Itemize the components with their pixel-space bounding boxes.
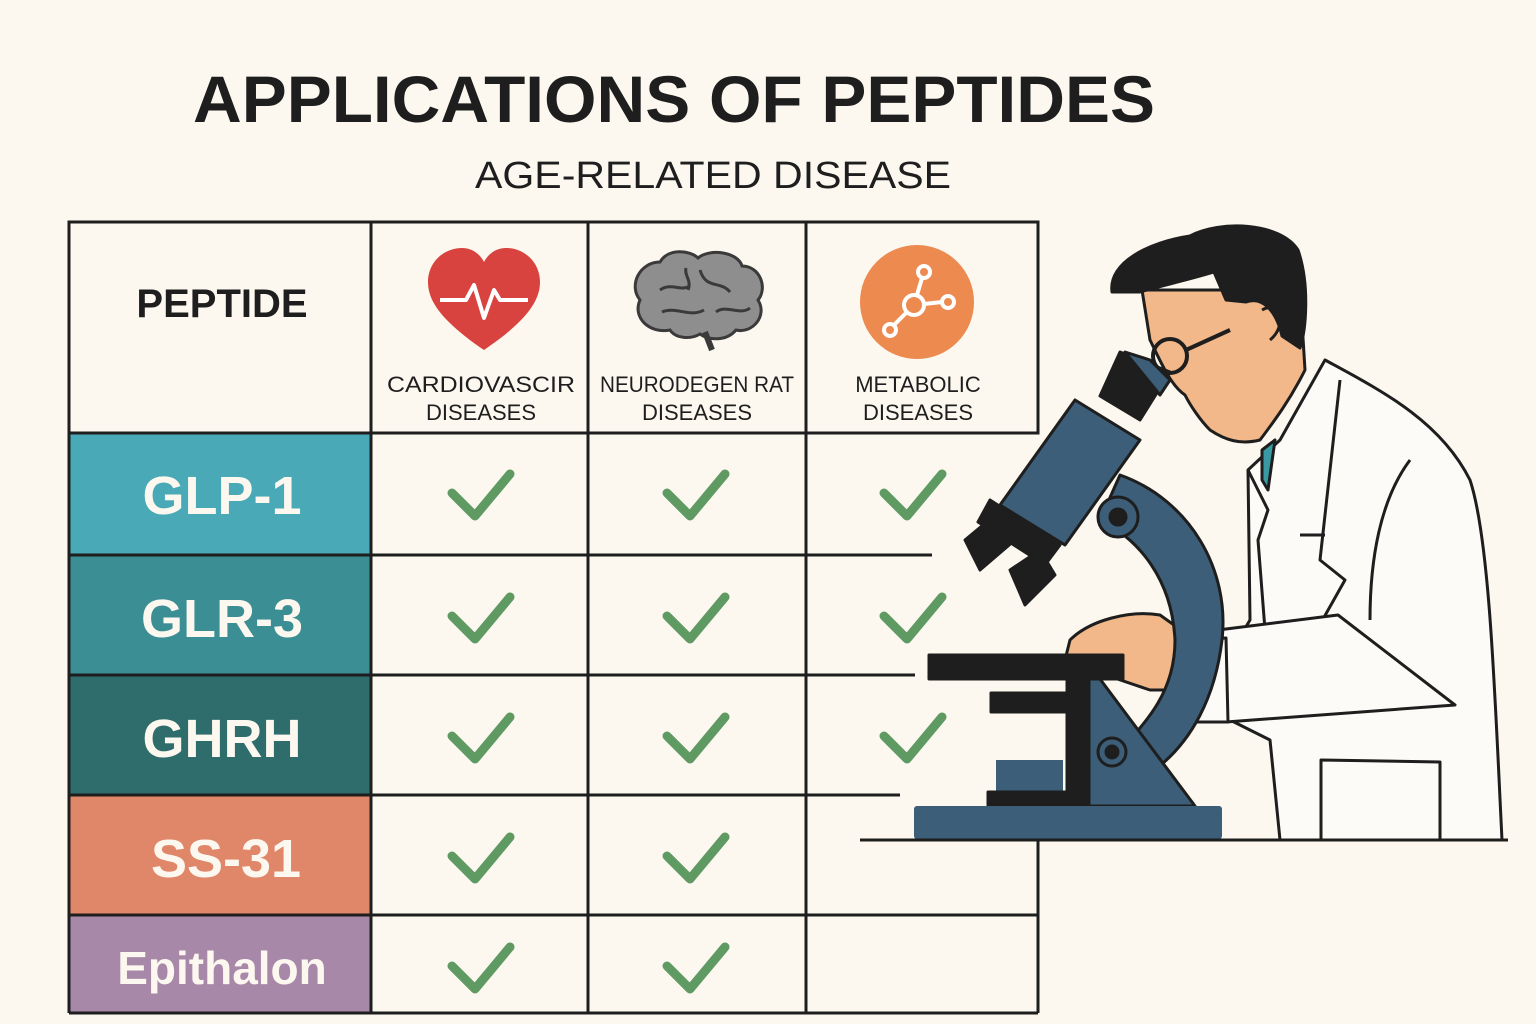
- icon: molecule: [860, 245, 974, 359]
- icon: brain: [635, 252, 762, 350]
- icon: heart: [428, 248, 540, 350]
- desk line: [860, 838, 1508, 842]
- sleeve & hand: [1218, 615, 1455, 722]
- table: [69, 222, 1038, 1013]
- header: peptide: PEPTIDE: [136, 282, 308, 326]
- title: APPLICATIONS OF PEPTIDES: [193, 62, 1155, 136]
- face: [1142, 290, 1305, 442]
- column headers: [387, 372, 981, 425]
- peptide names: [117, 466, 327, 994]
- column headers: DISEASES: [863, 400, 973, 425]
- pocket: [1321, 760, 1440, 840]
- shirt/tie: [1262, 440, 1275, 490]
- microscope arm: [1100, 475, 1223, 764]
- column headers: METABOLIC: [855, 372, 981, 397]
- peptide row colours: [69, 433, 371, 1013]
- column headers: DISEASES: [426, 400, 536, 425]
- peptide names: SS-31: [151, 829, 301, 889]
- column headers: CARDIOVASCIR: [387, 372, 575, 397]
- subtitle: AGE-RELATED DISEASE: [475, 155, 951, 197]
- column headers: NEURODEGEN RAT: [600, 372, 794, 397]
- peptide names: Epithalon: [117, 942, 327, 994]
- glasses: [1153, 339, 1187, 373]
- peptide names: GLR-3: [141, 589, 303, 649]
- ear: [1262, 308, 1280, 340]
- peptide names: GLP-1: [142, 466, 302, 526]
- body tube: [1000, 400, 1140, 545]
- check marks: [452, 474, 942, 989]
- peptide names: GHRH: [142, 709, 302, 769]
- column headers: DISEASES: [642, 400, 752, 425]
- illustration: scientist with microscope: [914, 226, 1502, 840]
- hair: [1112, 226, 1306, 348]
- coat: [1226, 360, 1502, 840]
- stage & base: [929, 655, 1123, 679]
